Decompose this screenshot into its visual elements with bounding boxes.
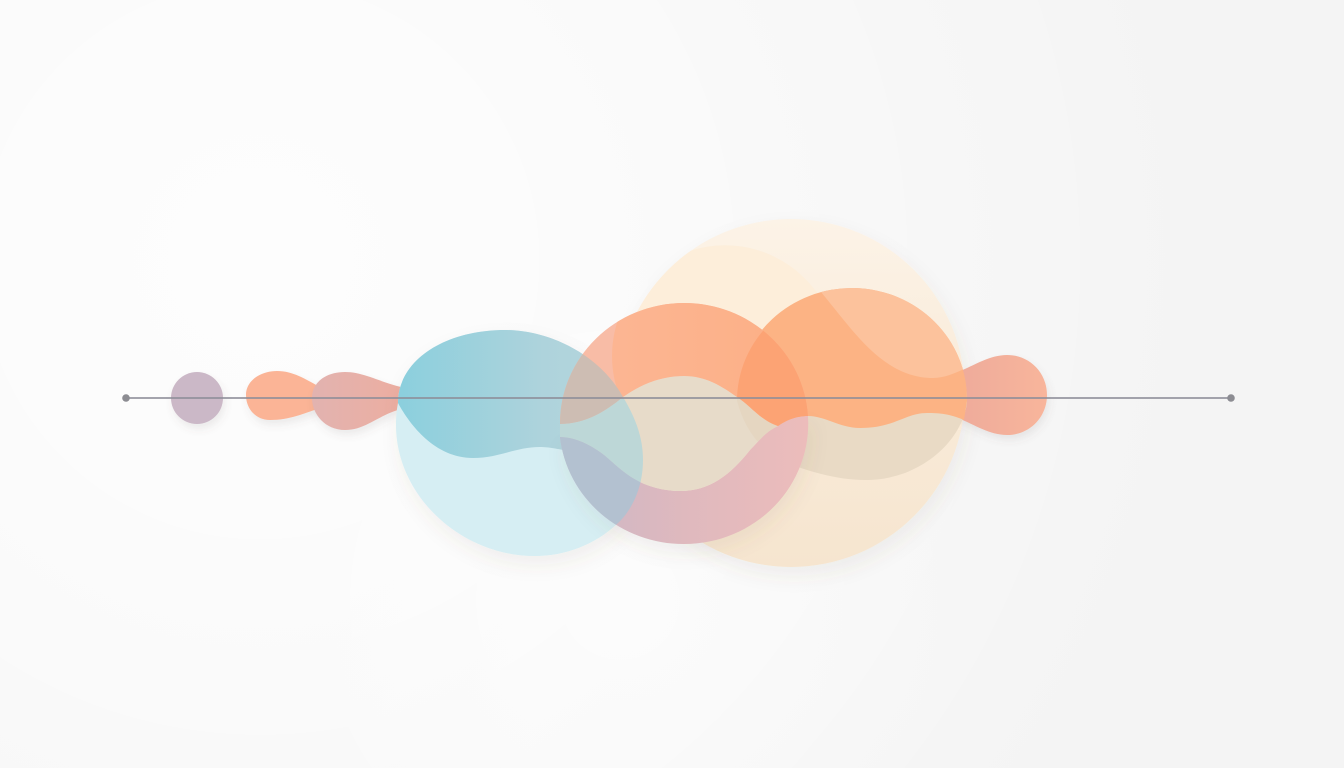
cluster: overlaps with blue blob bbox=[560, 354, 643, 524]
overlap blue and lens bbox=[560, 399, 643, 482]
tan lower bowl bbox=[737, 290, 967, 480]
orange arc inner tone bbox=[612, 303, 778, 426]
horizontal axis line with end dots bbox=[122, 394, 1235, 402]
inner warm wave overlay bbox=[638, 246, 805, 311]
small blobs on left bbox=[171, 371, 410, 430]
pink lower band bbox=[560, 416, 808, 544]
lens over tan overlap bbox=[700, 397, 778, 480]
mauve circle bbox=[171, 372, 223, 424]
orange upper arc bbox=[560, 303, 808, 426]
overlap blue and orange bbox=[560, 354, 623, 424]
overlap orange with right peach bbox=[737, 330, 808, 426]
large cream circle base bbox=[617, 219, 965, 567]
right end dot bbox=[1227, 394, 1235, 402]
lighter upper peach area bbox=[821, 288, 963, 378]
peach wave band bbox=[737, 288, 967, 428]
overlap blue and pink bbox=[560, 437, 640, 524]
light blue lower blob bbox=[396, 330, 643, 556]
central lens bbox=[560, 376, 778, 491]
pink small blob bbox=[312, 372, 410, 430]
cluster: orange and pink ring circle bbox=[560, 303, 808, 544]
cluster: right peach circle with bulb bbox=[762, 288, 1050, 480]
darker blue upper blob bbox=[398, 330, 640, 458]
left end dot bbox=[122, 394, 130, 402]
cluster: blue blob bbox=[396, 330, 643, 556]
orange small blob bbox=[246, 371, 320, 420]
right end bulb bbox=[958, 355, 1047, 435]
axis line bbox=[126, 397, 1231, 399]
cluster: large cream circle bbox=[612, 219, 967, 567]
